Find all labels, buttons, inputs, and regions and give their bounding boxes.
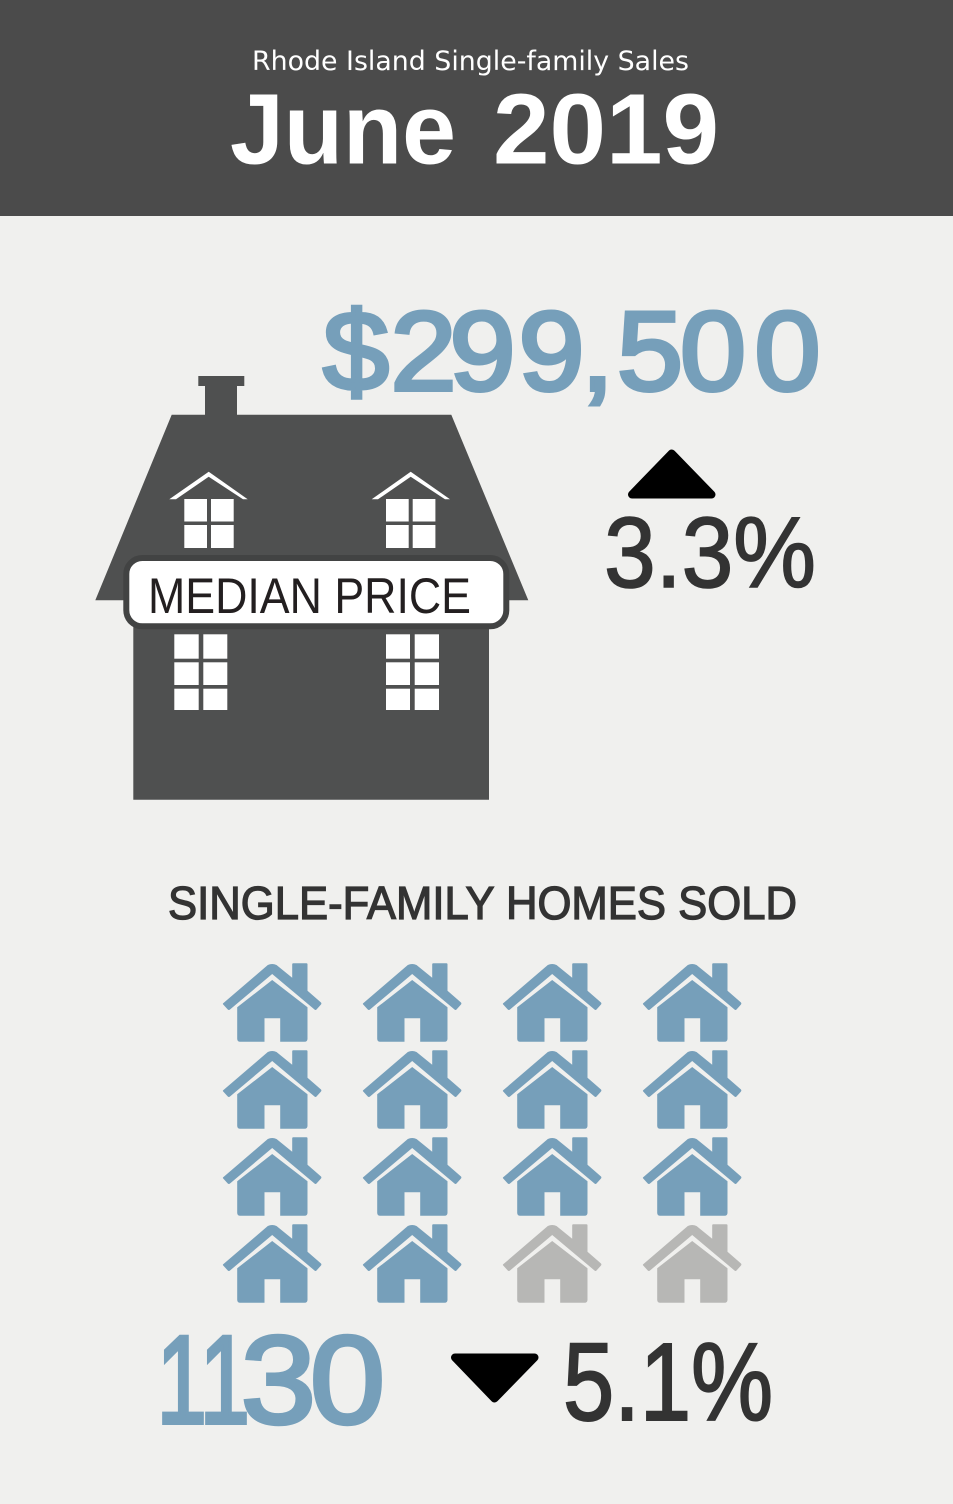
sold homes row 2 xyxy=(223,1050,741,1129)
dormer windows xyxy=(169,472,450,548)
median price label: MEDIAN PRICE xyxy=(148,568,471,624)
sold homes row 3 xyxy=(223,1137,741,1216)
sold homes row 1 xyxy=(223,963,741,1042)
icon: up arrow xyxy=(632,454,712,494)
median price sign xyxy=(126,558,506,626)
homes sold value xyxy=(157,1310,385,1451)
median price value: $299,500 xyxy=(323,290,821,414)
homes sold change: 5.1% xyxy=(563,1321,773,1444)
median price change: 3.3% xyxy=(604,497,816,609)
header subtitle: Rhode Island Single-family Sales xyxy=(252,46,689,77)
header title: 2019 xyxy=(493,74,719,186)
icon grid: homes sold xyxy=(223,963,741,1303)
sold homes row 4 xyxy=(223,1224,461,1303)
homes sold value: 30 xyxy=(241,1310,385,1450)
icon: large house with median price sign xyxy=(95,376,528,800)
panel: header band xyxy=(0,0,953,216)
lower windows xyxy=(174,634,439,710)
icon: down arrow xyxy=(455,1358,534,1398)
homes sold heading: SINGLE-FAMILY HOMES SOLD xyxy=(168,877,797,929)
header title: June xyxy=(230,74,456,186)
house silhouette xyxy=(95,376,528,800)
homes sold value: 11 xyxy=(157,1311,250,1451)
remainder homes, gray xyxy=(503,1224,741,1303)
